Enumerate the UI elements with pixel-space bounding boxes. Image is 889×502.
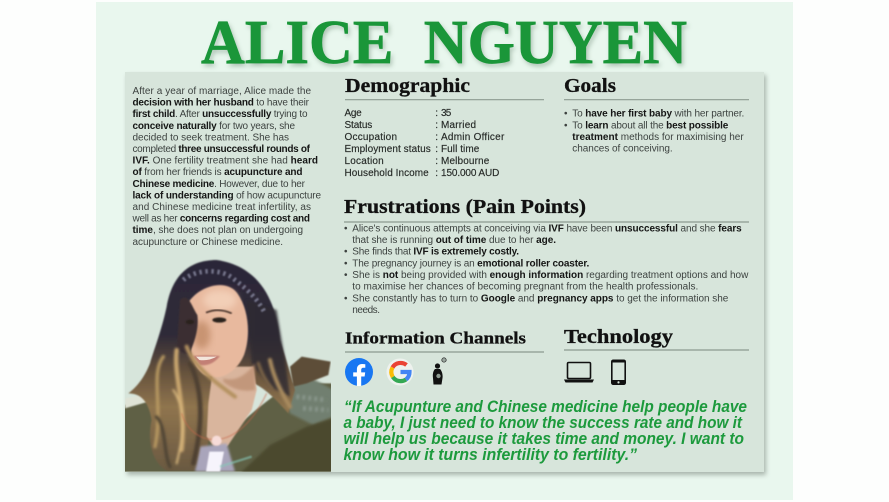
- demographic table: :: [435, 168, 438, 179]
- demographic table: :: [435, 120, 438, 131]
- demographic table: Melbourne: [441, 156, 490, 167]
- panel shadow: [127, 75, 766, 475]
- frustrations list: Alice's continuous attempts at conceiving via IVF have been unsuccessful and she fears: [352, 224, 742, 234]
- biography text: of from her friends is acupuncture and: [132, 167, 302, 178]
- lower coat: [242, 418, 333, 477]
- hair mass: [128, 260, 295, 471]
- frustrations list: She is not being provided with enough information regarding treatment options and how: [352, 270, 749, 281]
- biography text: acupuncture or Chinese medicine.: [132, 237, 283, 248]
- demographic table: Employment status: [344, 144, 431, 155]
- quote: [344, 398, 747, 464]
- right dark hair: [250, 307, 291, 397]
- biography text: IVF. One fertility treatment she had heard: [132, 156, 318, 167]
- neck shadow: [223, 363, 255, 391]
- quote: “If Acupunture and Chinese medicine help people have: [344, 398, 747, 416]
- demographic table: :: [435, 132, 438, 143]
- lens flare: [212, 436, 222, 446]
- section: goals: [564, 76, 749, 155]
- goals list: To learn about all the best possible: [572, 120, 729, 131]
- icon: laptop: [564, 362, 594, 382]
- goals list: •: [564, 109, 568, 120]
- demographic table: Admin Officer: [441, 132, 505, 143]
- fur trim: [290, 357, 331, 387]
- lens flare ring: [182, 393, 267, 440]
- icon: smartphone: [611, 360, 626, 385]
- section: information channels: [345, 328, 544, 386]
- biography text: Chinese medicine. However, due to her: [132, 179, 306, 190]
- frustrations list: needs.: [352, 305, 380, 316]
- portrait photo: [120, 260, 333, 477]
- demographic table: Occupation: [344, 132, 397, 143]
- frustrations list: •: [344, 247, 348, 258]
- demographic table: Household Income: [344, 168, 429, 179]
- hood snow: [297, 397, 328, 410]
- demographic table: Full time: [441, 144, 480, 155]
- biography text: first child. After unsuccessfully trying to: [132, 109, 308, 120]
- slide background: [96, 2, 793, 500]
- biography text: lack of understanding of how acupuncture: [132, 190, 321, 201]
- goals list: treatment methods for maximising her: [572, 132, 744, 143]
- frustrations list: [344, 224, 749, 316]
- demographic table: :: [435, 108, 438, 119]
- frustrations list: •: [344, 293, 348, 304]
- frustrations list: She constantly has to turn to Google and pregnancy apps to get the information she: [352, 293, 729, 304]
- biography text: well as her concerns regarding cost and: [132, 214, 310, 225]
- frustrations list: The pregnancy journey is an emotional roller coaster.: [352, 258, 590, 269]
- frustrations list: •: [344, 258, 348, 269]
- mouth: [193, 355, 220, 365]
- heading: technology: Technology: [564, 327, 673, 348]
- biography text: time, she does not plan on undergoing: [132, 225, 303, 236]
- demographic table: Married: [441, 120, 476, 131]
- demographic table: :: [435, 156, 438, 167]
- frustrations list: •: [344, 270, 348, 281]
- face shadow: [193, 321, 210, 349]
- frustrations list: that she is running out of time due to her age.: [352, 235, 556, 246]
- section: demographic: [344, 76, 544, 179]
- quote: a baby, I just need to know the success rate and how it: [344, 414, 743, 432]
- biography text: [132, 86, 321, 248]
- biography text: conceive naturally for two years, she: [132, 121, 295, 132]
- biography text: and Chinese medicine treat infertility, as: [132, 202, 311, 213]
- demographic table: Age: [344, 108, 362, 119]
- neck and chest: [207, 367, 257, 453]
- biography text: decision with her husband to have their: [132, 98, 310, 109]
- eyes: [212, 317, 226, 323]
- coat: [120, 383, 333, 477]
- demographic table: Location: [344, 156, 384, 167]
- section: frustrations: [344, 197, 749, 316]
- inner shirt: [195, 443, 235, 472]
- icon: google: [386, 358, 414, 386]
- goals list: •: [564, 120, 568, 131]
- quote: know how it turns infertility to fertility.”: [344, 446, 638, 464]
- quote: will help us because it takes time and money. I want to: [344, 430, 744, 448]
- heading: information channels: Information Channels: [345, 328, 527, 348]
- demographic table: :: [435, 144, 438, 155]
- goals list: [564, 109, 744, 155]
- goals list: To have her first baby with her partner.: [572, 109, 744, 120]
- hair snow: [183, 271, 265, 313]
- frustrations list: •: [344, 224, 348, 234]
- frustrations list: She finds that IVF is extremely costly.: [352, 247, 519, 258]
- icon: facebook: [345, 358, 373, 386]
- persona infographic: [96, 2, 793, 500]
- blonde strands: [155, 347, 290, 467]
- demographic table: 150.000 AUD: [441, 168, 499, 179]
- section: technology: [564, 327, 749, 385]
- title: ALICE NGUYEN: [201, 9, 687, 77]
- collar highlight: [125, 398, 146, 409]
- goals list: chances of conceiving.: [572, 144, 673, 155]
- hood: [289, 380, 331, 425]
- heading: frustrations: Frustrations (Pain Points): [344, 197, 586, 218]
- frustrations list: to maximise her chances of becoming pregnant from the health professionals.: [352, 282, 698, 293]
- demographic table: Status: [344, 120, 372, 131]
- face highlight: [203, 290, 237, 310]
- demographic table: 35: [441, 108, 452, 119]
- biography text: completed three unsuccessful rounds of: [132, 144, 311, 155]
- biography text: decided to seek treatment. She has: [132, 132, 289, 143]
- heading: demographic: Demographic: [345, 76, 470, 97]
- icon: pregnant woman app: [433, 358, 446, 384]
- title: ALICE NGUYEN: [203, 12, 689, 80]
- hair over face: [177, 298, 198, 355]
- demographic table: [344, 108, 505, 179]
- biography text: After a year of marriage, Alice made the: [132, 86, 311, 97]
- main panel: [125, 72, 764, 472]
- heading: goals: Goals: [564, 76, 616, 97]
- face: [187, 285, 248, 377]
